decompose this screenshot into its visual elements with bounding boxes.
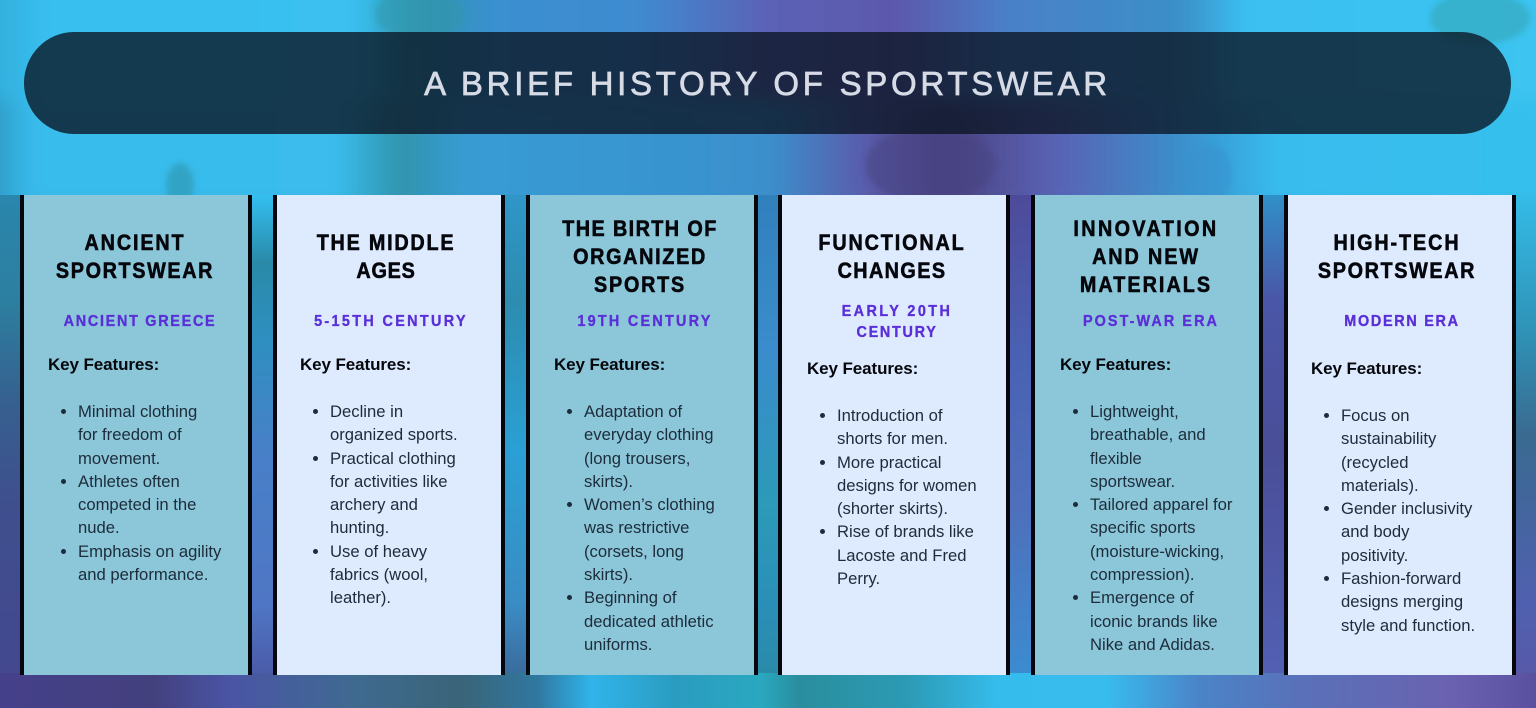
feature list: for activities like	[330, 472, 447, 491]
feature list: Minimal clothing	[78, 402, 197, 421]
era: modern era: MODERN ERA	[1344, 313, 1460, 330]
era: ancient greece: ANCIENT GREECE	[64, 313, 216, 330]
feature list: for freedom of	[78, 425, 182, 444]
heading: innovation and new materials: MATERIALS	[1080, 272, 1212, 297]
feature list: (shorter skirts).	[837, 499, 948, 518]
heading: ancient sportswear: ANCIENT	[85, 230, 185, 255]
key features label: Key Features:	[1060, 355, 1171, 374]
heading: high-tech sportswear: HIGH-TECH	[1333, 230, 1461, 255]
heading: ancient sportswear	[56, 230, 214, 283]
era: 5-15th century: 5-15TH CENTURY	[314, 313, 468, 330]
feature list: Lacoste and Fred	[837, 546, 967, 565]
feature list: Athletes often	[78, 472, 180, 491]
era: early 20th century: CENTURY	[856, 324, 938, 341]
feature list: Perry.	[837, 569, 880, 588]
feature list: movement.	[78, 449, 160, 468]
feature list: (corsets, long	[584, 542, 684, 561]
key features label: Key Features:	[300, 355, 411, 374]
heading: functional changes: CHANGES	[838, 258, 946, 283]
era: post-war era: POST-WAR ERA	[1083, 313, 1219, 330]
key features label: Key Features:	[1311, 359, 1422, 378]
heading: high-tech sportswear: SPORTSWEAR	[1318, 258, 1476, 283]
heading: the birth of organized sports: SPORTS	[594, 272, 686, 297]
feature list	[61, 402, 222, 584]
heading: the birth of organized sports	[562, 216, 718, 297]
feature list	[820, 406, 977, 588]
feature list: designs merging	[1341, 592, 1463, 611]
feature list: everyday clothing	[584, 425, 714, 444]
title: A BRIEF HISTORY OF SPORTSWEAR	[424, 65, 1111, 102]
feature list: archery and	[330, 495, 418, 514]
feature list: sustainability	[1341, 429, 1436, 448]
feature list: Lightweight,	[1090, 402, 1179, 421]
feature list: sportswear.	[1090, 472, 1175, 491]
feature list: hunting.	[330, 518, 389, 537]
heading: high-tech sportswear	[1318, 230, 1476, 283]
feature list	[567, 402, 715, 654]
feature list: Tailored apparel for	[1090, 495, 1232, 514]
heading: innovation and new materials	[1073, 216, 1219, 297]
feature list: Gender inclusivity	[1341, 499, 1472, 518]
feature list: Adaptation of	[584, 402, 682, 421]
feature list: (recycled	[1341, 453, 1409, 472]
feature list: (long trousers,	[584, 449, 690, 468]
feature list: Beginning of	[584, 588, 677, 607]
feature list: skirts).	[584, 472, 633, 491]
feature list: and performance.	[78, 565, 208, 584]
heading: the middle ages: AGES	[356, 258, 416, 283]
feature list: Decline in	[330, 402, 403, 421]
era: early 20th century: EARLY 20TH	[842, 303, 952, 320]
feature list: Rise of brands like	[837, 522, 974, 541]
feature list: was restrictive	[584, 518, 689, 537]
feature list: positivity.	[1341, 546, 1408, 565]
feature list: designs for women	[837, 476, 977, 495]
heading: the middle ages: THE MIDDLE	[317, 230, 455, 255]
feature list: leather).	[330, 588, 391, 607]
feature list	[313, 402, 458, 607]
panel: the middle ages	[273, 195, 505, 675]
feature list: Emphasis on agility	[78, 542, 221, 561]
era: early 20th century	[842, 303, 952, 341]
heading: innovation and new materials: AND NEW	[1092, 244, 1200, 269]
feature list: (moisture-wicking,	[1090, 542, 1224, 561]
feature list: Introduction of	[837, 406, 942, 425]
feature list: Women’s clothing	[584, 495, 715, 514]
heading: functional changes: FUNCTIONAL	[818, 230, 966, 255]
feature list: Fashion-forward	[1341, 569, 1461, 588]
feature list: Emergence of	[1090, 588, 1194, 607]
heading: the birth of organized sports: THE BIRTH OF	[562, 216, 718, 241]
feature list: skirts).	[584, 565, 633, 584]
feature list: shorts for men.	[837, 429, 948, 448]
feature list: Practical clothing	[330, 449, 456, 468]
title banner	[24, 32, 1511, 134]
feature list: Nike and Adidas.	[1090, 635, 1215, 654]
panel: functional changes	[778, 195, 1010, 675]
feature list: style and function.	[1341, 616, 1475, 635]
key features label: Key Features:	[48, 355, 159, 374]
feature list: competed in the	[78, 495, 196, 514]
feature list: Focus on	[1341, 406, 1409, 425]
feature list	[1324, 406, 1475, 635]
heading: ancient sportswear: SPORTSWEAR	[56, 258, 214, 283]
heading: innovation and new materials: INNOVATION	[1073, 216, 1219, 241]
feature list: uniforms.	[584, 635, 652, 654]
heading: the middle ages	[316, 230, 455, 283]
feature list: specific sports	[1090, 518, 1195, 537]
feature list: More practical	[837, 453, 942, 472]
feature list: Use of heavy	[330, 542, 427, 561]
feature list: materials).	[1341, 476, 1419, 495]
feature list: compression).	[1090, 565, 1194, 584]
panel: innovation and new materials	[1031, 195, 1263, 675]
feature list: dedicated athletic	[584, 612, 714, 631]
era: 19th century: 19TH CENTURY	[577, 313, 713, 330]
feature list	[1073, 402, 1232, 654]
panel: ancient sportswear	[20, 195, 252, 675]
key features label: Key Features:	[554, 355, 665, 374]
feature list: and body	[1341, 522, 1409, 541]
heading: functional changes	[818, 230, 966, 283]
feature list: organized sports.	[330, 425, 458, 444]
feature list: iconic brands like	[1090, 612, 1218, 631]
feature list: fabrics (wool,	[330, 565, 428, 584]
panel: the birth of organized sports	[526, 195, 758, 675]
panel: high-tech sportswear	[1284, 195, 1516, 675]
feature list: breathable, and	[1090, 425, 1206, 444]
heading: the birth of organized sports: ORGANIZED	[573, 244, 707, 269]
feature list: flexible	[1090, 449, 1142, 468]
key features label: Key Features:	[807, 359, 918, 378]
feature list: nude.	[78, 518, 120, 537]
